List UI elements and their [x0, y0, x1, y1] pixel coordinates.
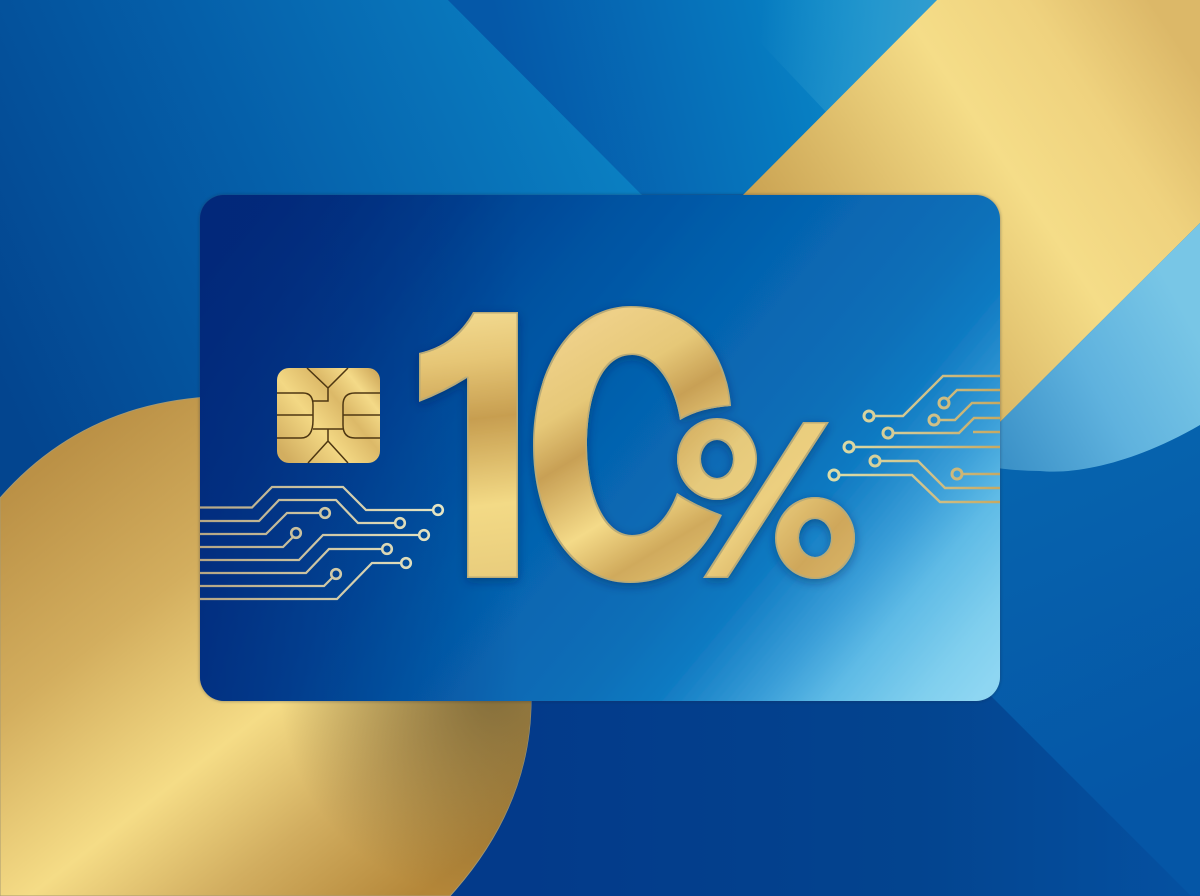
panel: payment card [200, 195, 1000, 701]
background panel: gold diagonal band [740, 0, 1200, 432]
digit 0: 0 [520, 230, 747, 659]
circuit traces: right [829, 376, 1000, 502]
background panel: light blue curved shape [990, 223, 1200, 472]
background panel: upper left blue [0, 0, 760, 560]
background panel: gold circle [0, 397, 531, 896]
background panel: lower dark blue triangle [440, 690, 1191, 896]
percent sign: % [670, 376, 867, 624]
icon: smart card chip [277, 368, 380, 463]
big number: 10% [416, 306, 860, 590]
digit 1: 1 [380, 239, 589, 657]
background panel: upper middle blue [448, 0, 937, 194]
background panel: light diagonal band [720, 0, 937, 112]
circuit traces: left [200, 487, 443, 599]
